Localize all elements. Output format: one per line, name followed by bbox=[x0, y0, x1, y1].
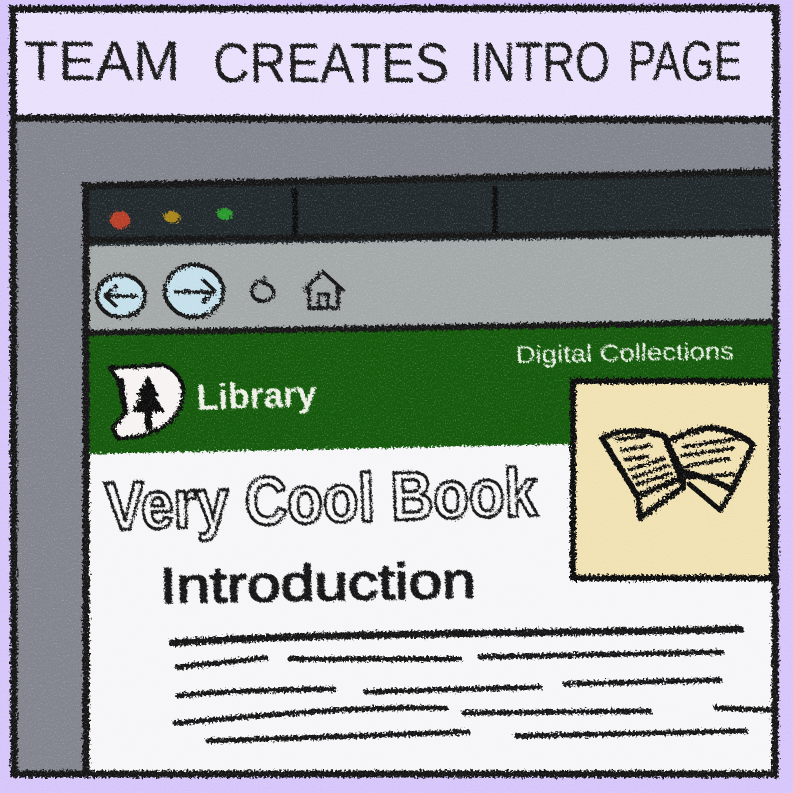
toolbar bbox=[88, 236, 772, 336]
title: TEAM bbox=[24, 29, 180, 92]
icon: back arrow bbox=[97, 275, 145, 317]
site name: Library bbox=[196, 373, 317, 418]
title: PAGE bbox=[628, 29, 742, 92]
site header bbox=[88, 322, 772, 454]
icon: red window button bbox=[110, 211, 130, 229]
book title: Very Cool Book bbox=[104, 454, 538, 545]
icon: green window button bbox=[217, 208, 233, 220]
logo bbox=[110, 365, 183, 438]
icon: open book bbox=[602, 428, 753, 518]
digital collections link: Digital Collections bbox=[516, 338, 734, 369]
illustration card bbox=[573, 381, 772, 578]
text rules: body paragraph lines bbox=[172, 629, 770, 741]
title band bbox=[14, 10, 774, 118]
title: INTRO bbox=[470, 30, 610, 93]
icon: yellow window button bbox=[164, 211, 180, 223]
icon: home bbox=[303, 272, 344, 308]
icon: forward arrow bbox=[165, 265, 223, 317]
section heading: Introduction bbox=[159, 552, 476, 614]
icon: reload bbox=[252, 277, 274, 301]
content page bbox=[86, 440, 772, 772]
title: CREATES bbox=[213, 31, 449, 94]
title bbox=[24, 29, 742, 94]
browser window bbox=[86, 174, 772, 772]
tab bar bbox=[86, 174, 772, 246]
browser backdrop bbox=[16, 118, 772, 772]
